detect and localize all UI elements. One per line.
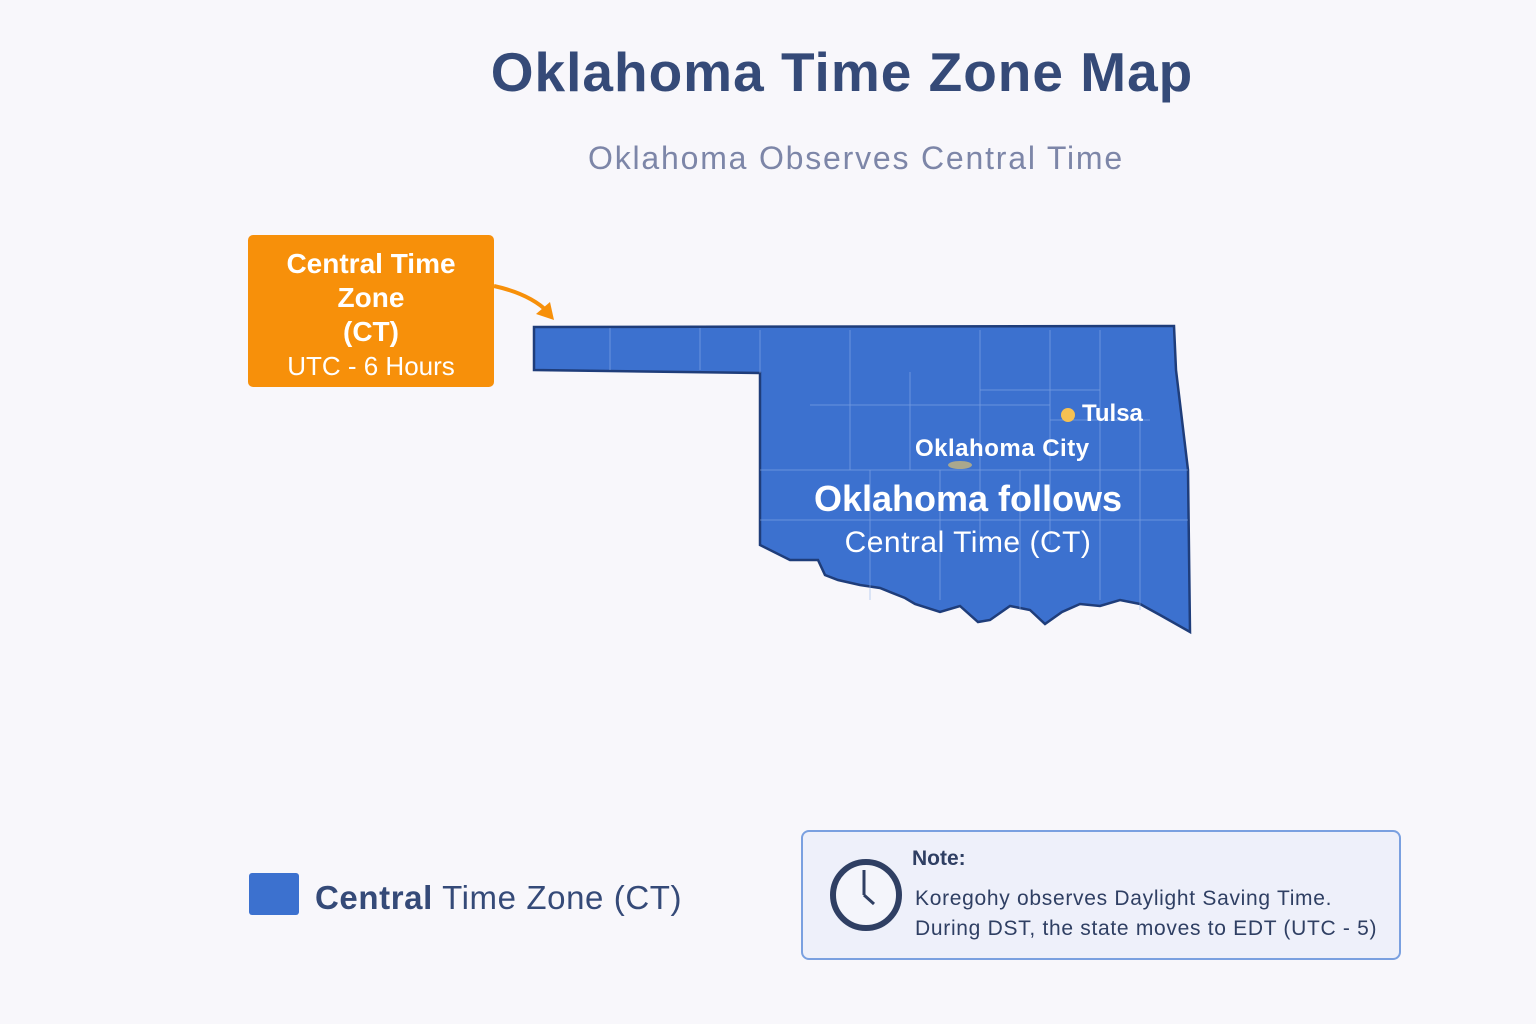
arrow: callout to map bbox=[494, 284, 554, 320]
note text: During DST, the state moves to EDT (UTC - 5) bbox=[915, 917, 1377, 940]
map text: Central Time (CT) bbox=[845, 526, 1091, 559]
callout: central time zone: Zone bbox=[338, 282, 404, 313]
note text bbox=[915, 887, 1377, 940]
marker: tulsa bbox=[1061, 408, 1075, 422]
subtitle: Oklahoma Observes Central Time bbox=[588, 140, 1124, 176]
map text bbox=[814, 478, 1122, 559]
callout: central time zone: (CT) bbox=[343, 316, 399, 347]
marker: oklahoma city bbox=[948, 461, 972, 469]
callout: central time zone: UTC - 6 Hours bbox=[287, 351, 455, 381]
legend label: Central Time Zone (CT) bbox=[315, 879, 682, 916]
icon: clock bbox=[830, 859, 902, 931]
note text: Koregohy observes Daylight Saving Time. bbox=[915, 887, 1332, 910]
map text: Oklahoma follows bbox=[814, 478, 1122, 519]
title: Oklahoma Time Zone Map bbox=[491, 41, 1193, 103]
legend swatch bbox=[249, 873, 299, 915]
callout: central time zone: Central Time bbox=[286, 248, 456, 279]
legend bbox=[249, 873, 682, 916]
note box bbox=[801, 830, 1401, 960]
label: tulsa: Tulsa bbox=[1082, 400, 1143, 427]
note heading: Note: bbox=[912, 847, 966, 870]
label: oklahoma city: Oklahoma City bbox=[915, 435, 1090, 462]
callout: central time zone bbox=[248, 235, 494, 387]
